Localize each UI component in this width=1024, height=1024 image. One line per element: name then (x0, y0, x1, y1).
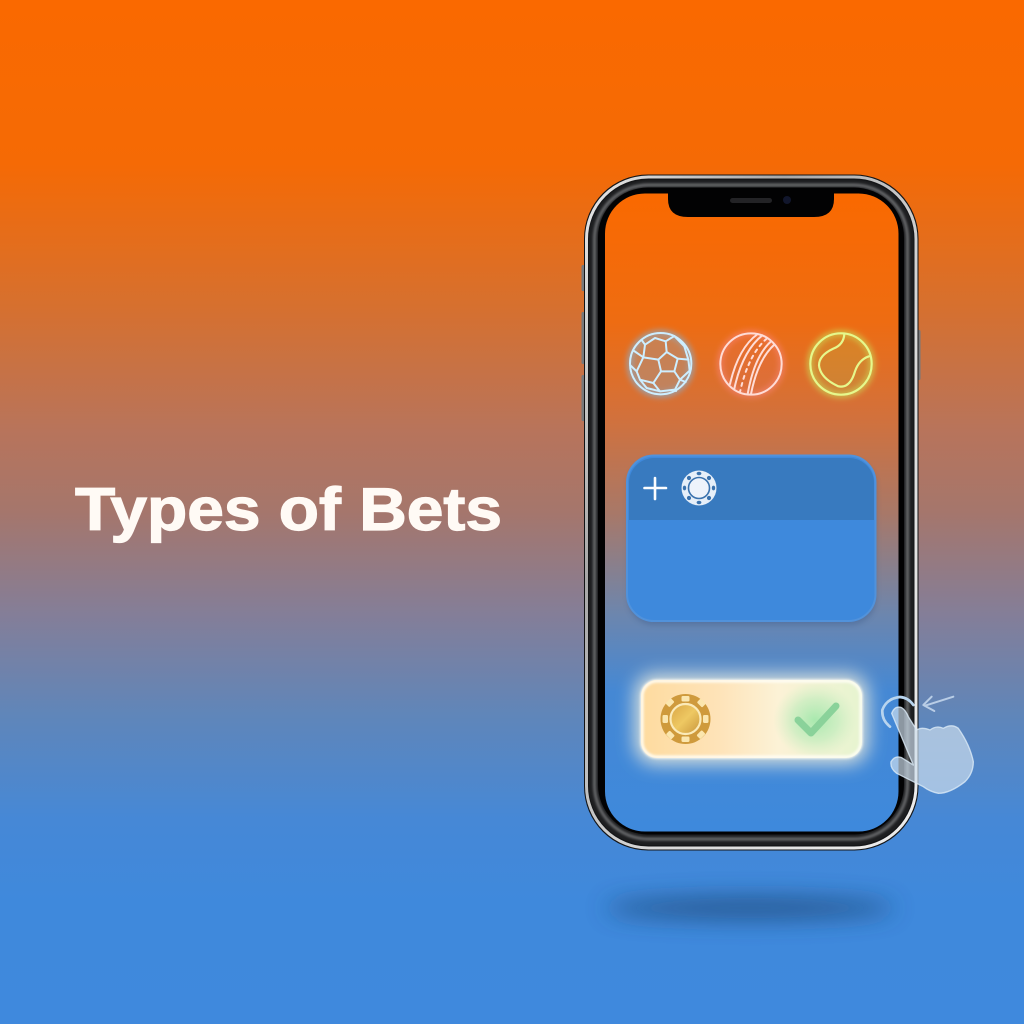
phone body (584, 174, 918, 850)
icon: tapping hand (882, 697, 973, 793)
speaker (730, 198, 772, 203)
icon: soccer ball (630, 333, 692, 395)
hand shape (891, 707, 973, 793)
card body (627, 456, 876, 621)
notch (668, 193, 834, 217)
panel: confirm button (635, 674, 868, 764)
phone shadow (605, 897, 895, 919)
icon: tennis ball (810, 333, 872, 395)
icon: plus (644, 478, 666, 499)
icon: gold chip (660, 694, 710, 744)
phone screen (605, 194, 898, 832)
tap ring (882, 697, 913, 727)
panel: bet slip (627, 456, 876, 625)
phone (582, 174, 920, 850)
side buttons (582, 265, 920, 421)
tap arrow (923, 697, 953, 711)
sport icons row (630, 333, 872, 395)
camera (783, 196, 791, 204)
button edge (642, 681, 861, 757)
button glow (635, 674, 868, 764)
card header (629, 458, 874, 520)
card shadow (628, 460, 876, 625)
icon: poker chip (682, 470, 716, 506)
check glow (773, 682, 857, 758)
icon: check mark (798, 706, 836, 733)
button body (641, 680, 862, 758)
icon: cricket ball (720, 333, 782, 395)
title: Types of Bets (75, 476, 502, 543)
